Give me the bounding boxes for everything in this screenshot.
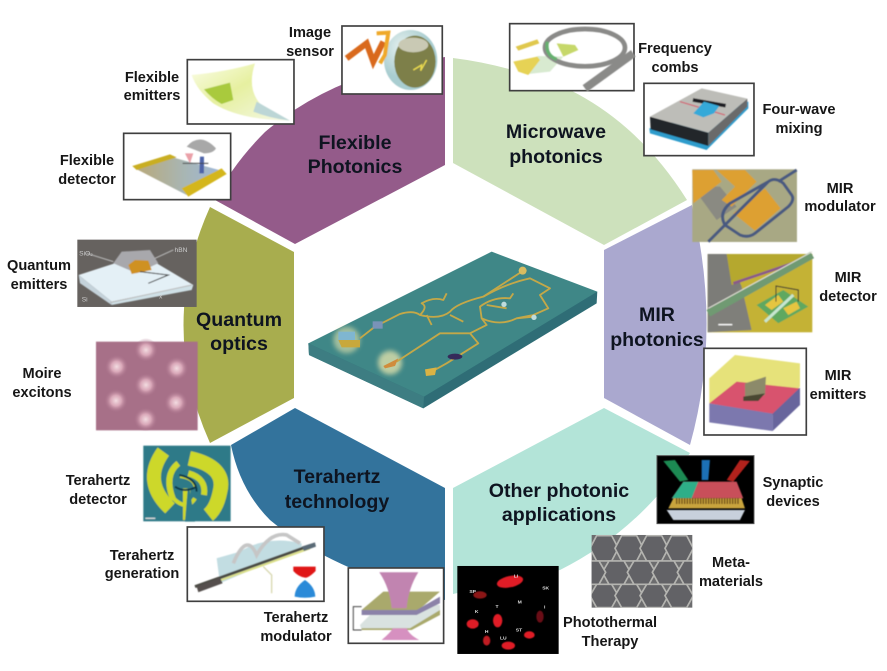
label: Flexible detector: detector xyxy=(58,172,116,188)
label: Image sensor: Image xyxy=(289,25,331,41)
label: Terahertz modulator: modulator xyxy=(260,629,332,645)
icon: MIR detector xyxy=(708,252,812,332)
icon: photothermal therapy: M xyxy=(518,600,522,606)
label: Frequency combs: combs xyxy=(651,60,699,76)
icon: image sensor xyxy=(342,26,442,94)
panel: Other photonic applications segment xyxy=(453,408,690,594)
icon: quantum emitters: Si xyxy=(82,297,88,304)
icon: quantum emitters xyxy=(77,240,197,307)
label: Moire excitons: Moire xyxy=(23,366,61,382)
icon: photothermal therapy: H xyxy=(485,629,489,635)
heading: Terahertz technology: Terahertz xyxy=(294,466,380,488)
label: Photothermal Therapy: Therapy xyxy=(582,634,639,650)
label: Four-wave mixing: Four-wave xyxy=(763,102,835,118)
heading: MIR photonics: MIR xyxy=(639,304,675,326)
icon: metamaterials xyxy=(592,535,692,608)
label: MIR detector: detector xyxy=(819,289,877,305)
label: Meta-materials: materials xyxy=(699,574,763,590)
heading: Flexible Photonics: Photonics xyxy=(308,156,402,178)
panel: Microwave photonics segment xyxy=(453,58,687,245)
icon: photothermal therapy: K xyxy=(475,609,479,615)
label: MIR detector: MIR xyxy=(835,270,861,286)
heading: MIR photonics: photonics xyxy=(610,329,704,351)
label: MIR modulator: modulator xyxy=(804,199,876,215)
label: Terahertz modulator: Terahertz xyxy=(264,610,328,626)
panel: Quantum optics segment xyxy=(184,207,294,443)
icon: photothermal therapy: SP xyxy=(469,589,477,595)
label: MIR emitters: emitters xyxy=(810,387,866,403)
icon: photothermal therapy xyxy=(457,566,559,654)
label: Quantum emitters: emitters xyxy=(11,277,67,293)
icon: flexible emitters xyxy=(187,60,294,124)
icon: photothermal therapy: I xyxy=(544,604,546,610)
panel: Flexible Photonics segment xyxy=(215,57,445,244)
label: Synaptic devices: Synaptic xyxy=(763,475,823,491)
icon: MIR emitters xyxy=(704,348,806,435)
icon: photothermal therapy: T xyxy=(495,604,499,610)
label: MIR emitters: MIR xyxy=(825,368,851,384)
heading: Terahertz technology: technology xyxy=(285,491,389,513)
heading: Quantum optics: Quantum xyxy=(196,309,282,331)
label: Four-wave mixing: mixing xyxy=(775,121,823,137)
icon: quantum emitters: x xyxy=(159,293,163,300)
icon: synaptic devices xyxy=(657,456,754,524)
heading: Microwave photonics: photonics xyxy=(509,146,603,168)
panel: Terahertz technology segment xyxy=(231,408,445,600)
icon: four-wave mixing xyxy=(644,83,754,156)
label: Frequency combs: Frequency xyxy=(638,41,712,57)
label: Quantum emitters: Quantum xyxy=(7,258,71,274)
label: Flexible detector: Flexible xyxy=(60,153,114,169)
icon: terahertz generation xyxy=(187,527,324,601)
icon: terahertz detector xyxy=(143,446,231,522)
label: Terahertz detector: Terahertz xyxy=(66,473,130,489)
label: Flexible emitters: emitters xyxy=(124,88,180,104)
icon: frequency combs xyxy=(510,24,634,91)
label: Terahertz generation: Terahertz xyxy=(110,548,174,564)
label: Terahertz generation: generation xyxy=(105,566,179,582)
icon: quantum emitters: SiO₂ xyxy=(79,250,93,257)
label: Image sensor: sensor xyxy=(286,44,334,60)
label: MIR modulator: MIR xyxy=(827,181,853,197)
icon: photothermal therapy: LU xyxy=(500,636,507,642)
label: Moire excitons: excitons xyxy=(12,385,72,401)
icon: Moire excitons xyxy=(96,338,198,431)
heading: Other photonic applications: Other photonic xyxy=(489,480,629,502)
heading: Flexible Photonics: Flexible xyxy=(319,132,391,154)
heading: Quantum optics: optics xyxy=(210,333,268,355)
panel: MIR photonics segment xyxy=(604,205,707,445)
icon: MIR modulator xyxy=(692,169,797,242)
central photonic chip xyxy=(308,252,597,408)
label: Synaptic devices: devices xyxy=(766,494,820,510)
icon: photothermal therapy: LI xyxy=(514,574,519,580)
heading: Microwave photonics: Microwave xyxy=(506,121,606,143)
icon: photothermal therapy: SK xyxy=(542,586,550,592)
label: Terahertz detector: detector xyxy=(69,492,127,508)
icon: terahertz modulator xyxy=(348,568,444,643)
label: Meta-materials: Meta- xyxy=(712,555,750,571)
icon: photothermal therapy: ST xyxy=(516,627,522,633)
icon: flexible detector xyxy=(124,133,231,200)
label: Photothermal Therapy: Photothermal xyxy=(563,615,657,631)
icon: quantum emitters: hBN xyxy=(175,247,188,254)
label: Flexible emitters: Flexible xyxy=(125,70,179,86)
heading: Other photonic applications: applications xyxy=(502,504,616,526)
